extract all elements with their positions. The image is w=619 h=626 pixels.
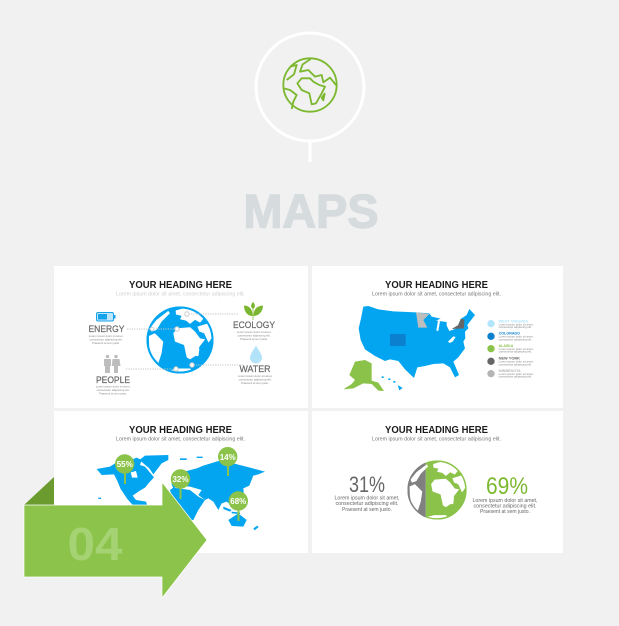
subtitle: panel 1: Lorem ipsum dolor sit amet, consectetur adipiscing elit. — [116, 292, 245, 298]
stat: 69%: consectetur adipiscing elit. — [474, 504, 536, 510]
legend: states: WEST VIRGINIA — [499, 319, 529, 323]
legend: states: ALASKA — [499, 344, 514, 348]
icon: people — [104, 355, 120, 373]
icon: plant — [244, 302, 263, 320]
stat: 69%: 69% — [486, 473, 528, 500]
label: ENERGY: Lorem ipsum dolor sit amet, — [89, 334, 123, 338]
legend: states: MINNESOTA — [499, 369, 521, 373]
legend: states — [487, 319, 534, 379]
heading: panel 1: YOUR HEADING HERE — [129, 279, 232, 291]
label: ENERGY — [88, 324, 125, 345]
label: ECOLOGY: consectetur adipiscing elit. — [238, 334, 271, 338]
label: PEOPLE: Praesent at sem justo. — [99, 392, 127, 396]
connector lines and markers — [126, 312, 243, 371]
icon: battery — [96, 312, 116, 321]
label: PEOPLE: Lorem ipsum dolor sit amet, — [96, 384, 130, 388]
icon: water drop — [250, 346, 262, 364]
legend: states: Lorem ipsum dolor sit amet, — [499, 322, 534, 326]
legend: states: consectetur adipiscing elit. — [499, 350, 532, 354]
pin: 32% — [171, 469, 190, 499]
label: ENERGY: Praesent at sem justo. — [92, 341, 120, 345]
label: ECOLOGY — [233, 320, 276, 341]
pin: 14%: 14% — [220, 453, 236, 462]
legend: states: consectetur adipiscing elit. — [499, 362, 532, 366]
pin: 32%: 32% — [172, 475, 189, 484]
legend: states: COLORADO — [499, 332, 520, 336]
arrow: section number 04 — [24, 477, 207, 598]
label: WATER — [238, 364, 272, 385]
legend: states: NEW YORK — [499, 357, 521, 361]
subtitle: panel 4: Lorem ipsum dolor sit amet, consectetur adipiscing elit. — [372, 436, 501, 442]
legend: states: consectetur adipiscing elit. — [499, 375, 532, 379]
stat: 69%: Lorem ipsum dolor sit amet, — [472, 498, 538, 504]
legend: states: Lorem ipsum dolor sit amet, — [499, 335, 534, 339]
label: ENERGY: ENERGY — [88, 324, 125, 335]
label: PEOPLE — [96, 375, 130, 396]
label: PEOPLE: consectetur adipiscing elit. — [97, 388, 130, 392]
label: WATER: WATER — [240, 364, 271, 375]
icon: globe in circle — [256, 33, 364, 162]
stat: 69%: Praesent at sem justo. — [480, 509, 530, 515]
title: MAPS: MAPS — [244, 184, 378, 238]
legend: states: Lorem ipsum dolor sit amet, — [499, 347, 534, 351]
panel: world map — [54, 411, 308, 553]
stat: 31%: Lorem ipsum dolor sit amet, — [334, 496, 400, 502]
label: WATER: Praesent at sem justo. — [241, 381, 269, 385]
globe: split grey and green — [408, 461, 466, 520]
globe: blue — [146, 306, 214, 374]
panel: energy ecology people water globe — [54, 266, 308, 408]
pin: 55% — [115, 454, 134, 484]
legend: states: consectetur adipiscing elit. — [499, 325, 532, 329]
pin: 55%: 55% — [117, 460, 133, 469]
label: ENERGY: consectetur adipiscing elit. — [90, 338, 123, 342]
label: PEOPLE: PEOPLE — [96, 375, 130, 386]
label: ECOLOGY: Praesent at sem justo. — [240, 337, 268, 341]
stat: 31% — [334, 472, 400, 513]
heading: panel 2: YOUR HEADING HERE — [385, 279, 488, 291]
heading: panel 4: YOUR HEADING HERE — [385, 424, 488, 436]
stat: 31%: Praesent at sem justo. — [342, 507, 392, 513]
map: world — [97, 455, 265, 530]
subtitle: panel 2: Lorem ipsum dolor sit amet, consectetur adipiscing elit. — [372, 292, 501, 298]
number: 04: 04 — [68, 518, 123, 570]
panel: percentage globe — [312, 411, 563, 553]
legend: states: Lorem ipsum dolor sit amet, — [499, 360, 534, 364]
pin: 68% — [229, 491, 248, 521]
label: WATER: Lorem ipsum dolor sit amet, — [238, 374, 272, 378]
label: ECOLOGY: ECOLOGY — [233, 320, 276, 331]
stat: 69% — [472, 473, 538, 515]
map: USA states — [343, 306, 475, 391]
subtitle: panel 3: Lorem ipsum dolor sit amet, consectetur adipiscing elit. — [116, 436, 245, 442]
legend: states: Lorem ipsum dolor sit amet, — [499, 372, 534, 376]
pin: 68%: 68% — [230, 497, 246, 506]
stat: 31%: 31% — [349, 472, 385, 497]
pin: 14% — [218, 447, 237, 476]
heading: panel 3: YOUR HEADING HERE — [129, 424, 232, 436]
label: ECOLOGY: Lorem ipsum dolor sit amet, — [237, 330, 271, 334]
panel: USA map — [312, 266, 563, 408]
stat: 31%: consectetur adipiscing elit. — [336, 501, 398, 507]
legend: states: consectetur adipiscing elit. — [499, 337, 532, 341]
label: WATER: consectetur adipiscing elit. — [239, 378, 272, 382]
